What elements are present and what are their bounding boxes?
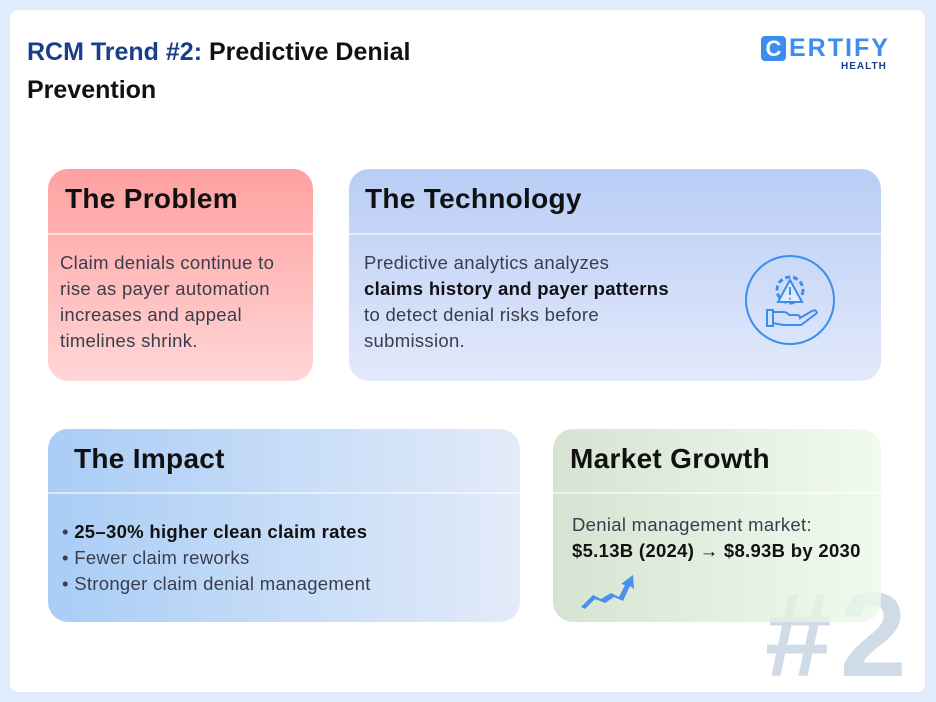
list: impact bullets xyxy=(62,521,371,594)
panel: problem xyxy=(48,169,313,381)
title: RCM Trend #2: Predictive Denial xyxy=(27,38,410,66)
text: technology: Predictive analytics analyzes xyxy=(364,252,609,273)
logo: ERTIFY xyxy=(789,34,890,62)
panel: market growth xyxy=(553,429,881,622)
heading: market growth: Market Growth xyxy=(570,443,770,474)
list: impact bullets: • Fewer claim reworks xyxy=(62,547,250,568)
text: problem: increases and appeal xyxy=(60,304,242,325)
text: market: Denial management market: xyxy=(572,514,812,535)
heading: the impact: The Impact xyxy=(74,443,225,474)
title xyxy=(27,38,410,104)
text: problem: Claim denials continue to xyxy=(60,252,274,273)
logo: C xyxy=(766,36,781,61)
icon: growth arrow xyxy=(581,575,634,609)
logo xyxy=(761,34,890,72)
text: technology: claims history and payer patterns xyxy=(364,278,669,299)
heading: the technology: The Technology xyxy=(365,183,582,214)
text: technology: submission. xyxy=(364,330,465,351)
text: market: $5.13B (2024) → $8.93B by 2030 xyxy=(572,540,861,561)
text: problem: rise as payer automation xyxy=(60,278,270,299)
list: impact bullets: • 25–30% higher clean claim rates xyxy=(62,521,367,542)
logo: HEALTH xyxy=(841,61,887,72)
text: technology: to detect denial risks before xyxy=(364,304,599,325)
icon: hand with warning gear xyxy=(745,255,835,345)
panel: impact xyxy=(48,429,520,622)
text: technology xyxy=(364,252,669,351)
text: problem xyxy=(60,252,274,351)
text: problem: timelines shrink. xyxy=(60,330,198,351)
title: Prevention xyxy=(27,76,156,104)
list: impact bullets: • Stronger claim denial management xyxy=(62,573,371,594)
heading: the problem: The Problem xyxy=(65,183,238,214)
panel: technology xyxy=(349,169,881,381)
text: market xyxy=(572,514,861,561)
